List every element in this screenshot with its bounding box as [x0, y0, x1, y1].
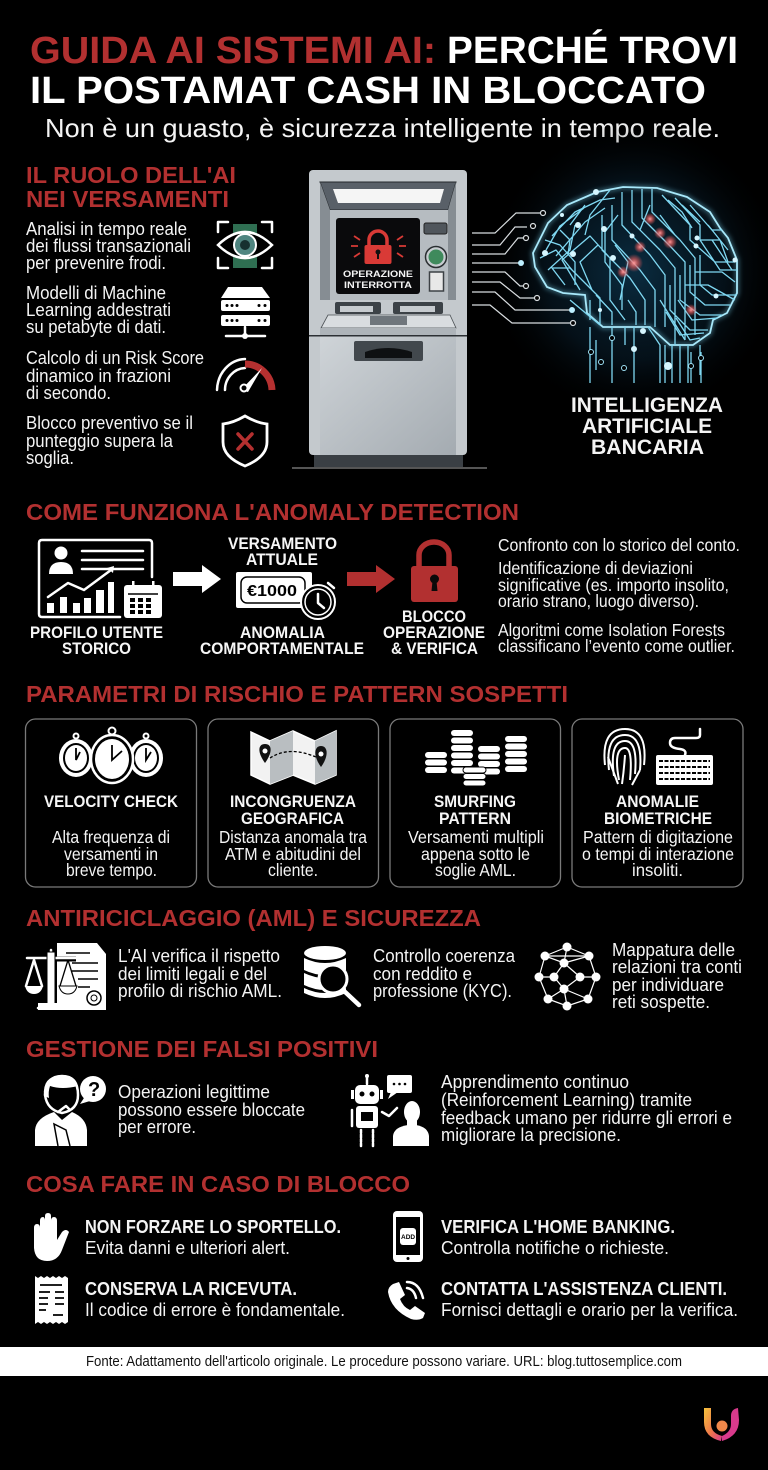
title: IL POSTAMAT CASH IN BLOCCATO — [30, 70, 706, 112]
circuit wires — [472, 210, 576, 326]
text: kyc: con reddito e — [373, 963, 472, 984]
subtitle: Non è un guasto, è sicurezza intelligente in tempo reale. — [45, 113, 720, 143]
icon: robot and human — [351, 1074, 429, 1146]
card: anomalie biometriche: insoliti. — [632, 860, 683, 880]
card: anomalie biometriche — [572, 719, 743, 887]
icon: user profile card — [39, 540, 152, 617]
icon: shield — [223, 416, 267, 466]
text: mappatura: reti sospette. — [612, 991, 710, 1012]
label: blocco operazione — [383, 607, 485, 658]
icon: eye — [218, 222, 272, 268]
heading: anomaly detection: COME FUNZIONA L'ANOMALY DETECTION — [26, 499, 519, 525]
label: versamento attuale — [228, 534, 337, 569]
text: anomaly explanation: classificano l’evento come outlier. — [498, 636, 735, 656]
text: blocco preventivo: Blocco preventivo se il — [26, 412, 193, 433]
text: limiti legali: L'AI verifica il rispetto — [118, 945, 280, 966]
title: PERCHÉ TROVI — [447, 28, 738, 72]
heading: cosa fare: COSA FARE IN CASO DI BLOCCO — [26, 1171, 410, 1197]
card: anomalie biometriche: o tempi di interazione — [582, 844, 734, 864]
icon: smartphone — [393, 1211, 423, 1262]
text: mappatura: relazioni tra conti — [612, 956, 742, 977]
icon: calendar — [124, 581, 162, 618]
card: incongruenza geografica: GEOGRAFICA — [241, 809, 344, 828]
label: anomalia comportamentale — [200, 623, 364, 658]
text: blocco preventivo — [26, 412, 193, 468]
text: apprendimento continuo — [441, 1071, 732, 1145]
card: velocity check: VELOCITY CHECK — [44, 792, 179, 811]
text: machine learning — [26, 282, 171, 337]
text: anomaly explanation: significative (es. importo insolito, — [498, 575, 729, 595]
label: profilo utente — [30, 623, 163, 658]
text: apprendimento continuo: Apprendimento continuo — [441, 1071, 629, 1092]
text: kyc: professione (KYC). — [373, 980, 512, 1001]
icon: smartphone: ADD — [401, 1234, 415, 1241]
label: blocco operazione: & VERIFICA — [391, 639, 478, 658]
footer: source bar — [0, 1347, 768, 1376]
text: home banking: Controlla notifiche o richieste. — [441, 1237, 669, 1258]
panel: falsi positivi — [26, 1036, 732, 1146]
text: anomaly explanation — [498, 535, 740, 656]
text: operazioni legittime: Operazioni legittime — [118, 1081, 270, 1102]
card: anomalie biometriche: ANOMALIE — [616, 792, 699, 811]
text: kyc: Controllo coerenza — [373, 945, 516, 966]
text: mappatura — [612, 939, 742, 1012]
icon: scales and document — [25, 943, 106, 1010]
text: machine learning: Modelli di Machine — [26, 282, 166, 303]
card: anomalie biometriche: BIOMETRICHE — [604, 809, 712, 828]
panel: parametri di rischio — [26, 681, 743, 887]
text: mappatura: Mappatura delle — [612, 939, 735, 960]
icon: map — [251, 731, 336, 784]
icon: phone call — [388, 1282, 425, 1320]
label: intelligenza artificiale bancaria: INTELLIGENZA — [571, 394, 723, 417]
card: velocity check: versamenti in — [64, 844, 158, 864]
card: incongruenza geografica: Distanza anomala tra — [219, 827, 367, 847]
icon: doubtful person — [35, 1075, 106, 1146]
text: analisi: Analisi in tempo reale — [26, 218, 187, 239]
icon: network graph — [534, 942, 600, 1010]
text: risk score — [26, 347, 204, 403]
text: limiti legali: dei limiti legali e del — [118, 963, 267, 984]
text: analisi: dei flussi transazionali — [26, 235, 191, 256]
atm screen: OPERAZIONE — [343, 269, 413, 279]
text: apprendimento continuo: feedback umano per ridurre gli errori e — [441, 1107, 732, 1128]
text: assistenza: Fornisci dettagli e orario per la verifica. — [441, 1299, 738, 1320]
card: anomalie biometriche: Pattern di digitazione — [583, 827, 733, 847]
title: GUIDA AI SISTEMI AI: — [30, 30, 436, 72]
label: anomalia comportamentale: COMPORTAMENTALE — [200, 639, 364, 658]
label: versamento attuale: ATTUALE — [246, 550, 318, 569]
text: mappatura: per individuare — [612, 974, 724, 995]
text: conserva ricevuta: CONSERVA LA RICEVUTA. — [85, 1279, 297, 1299]
label: blocco operazione: BLOCCO — [402, 607, 466, 626]
text: limiti legali: profilo di rischio AML. — [118, 980, 282, 1001]
heading: parametri di rischio: PARAMETRI DI RISCHIO E PATTERN SOSPETTI — [26, 681, 568, 707]
text: non forzare — [85, 1217, 341, 1258]
icon: fingerprint — [604, 729, 645, 785]
label: profilo utente: STORICO — [62, 639, 131, 658]
card: smurfing pattern — [390, 719, 560, 887]
text: operazioni legittime: possono essere bloccate — [118, 1099, 305, 1120]
icon: red padlock — [411, 542, 458, 602]
text: assistenza: CONTATTA L'ASSISTENZA CLIENTI. — [441, 1279, 727, 1299]
icon: stopwatches — [59, 728, 163, 783]
text: apprendimento continuo: (Reinforcement Learning) tramite — [441, 1089, 692, 1110]
text: anomaly explanation: Identificazione di deviazioni — [498, 558, 693, 578]
label: blocco operazione: OPERAZIONE — [383, 623, 485, 642]
text: anomaly explanation: Confronto con lo storico del conto. — [498, 535, 740, 555]
heading: ruolo dell'AI: IL RUOLO DELL'AI — [26, 162, 236, 188]
card: incongruenza geografica: INCONGRUENZA — [230, 792, 356, 811]
label: intelligenza artificiale bancaria — [571, 394, 723, 459]
panel: ruolo dell'AI — [26, 162, 272, 468]
icon: server — [221, 287, 270, 339]
text: risk score: di secondo. — [26, 382, 111, 403]
text: analisi — [26, 218, 191, 273]
card: velocity check: Alta frequenza di — [52, 827, 170, 847]
icon: banknote and clock — [236, 572, 335, 619]
text: home banking — [441, 1217, 675, 1258]
card: incongruenza geografica — [208, 719, 378, 887]
atm screen: INTERROTTA — [344, 280, 413, 290]
heading: antiriciclaggio: ANTIRICICLAGGIO (AML) E SICUREZZA — [26, 905, 481, 931]
icon: coin stacks — [425, 730, 527, 786]
text: limiti legali — [118, 945, 282, 1001]
atm screen — [336, 218, 420, 294]
text: conserva ricevuta: Il codice di errore è fondamentale. — [85, 1299, 345, 1320]
text: non forzare: Evita danni e ulteriori alert. — [85, 1237, 290, 1258]
arrow: red — [347, 565, 395, 593]
card: smurfing pattern: SMURFING — [434, 792, 516, 811]
icon: gauge — [217, 359, 272, 392]
text: conserva ricevuta — [85, 1279, 345, 1320]
panel: cosa fare — [26, 1171, 738, 1324]
text: risk score: dinamico in frazioni — [26, 365, 171, 386]
icon: doubtful person: ? — [88, 1079, 100, 1101]
panel: antiriciclaggio — [25, 905, 742, 1012]
panel: anomaly detection — [26, 499, 740, 658]
text: kyc — [373, 945, 516, 1001]
text: anomaly explanation: Algoritmi come Isolation Forests — [498, 620, 725, 640]
heading: falsi positivi: GESTIONE DEI FALSI POSITIVI — [26, 1036, 378, 1062]
logo — [704, 1408, 739, 1441]
text: apprendimento continuo: migliorare la precisione. — [441, 1124, 621, 1145]
text: machine learning: su petabyte di dati. — [26, 316, 166, 337]
label: versamento attuale: VERSAMENTO — [228, 534, 337, 553]
text: risk score: Calcolo di un Risk Score — [26, 347, 204, 368]
footer: source bar: Fonte: Adattamento dell'articolo originale. Le procedure possono variare. URL: blog.tuttosemplice.com — [86, 1353, 682, 1370]
text: operazioni legittime — [118, 1081, 305, 1137]
icon: banknote and clock: €1000 — [247, 583, 297, 600]
label: anomalia comportamentale: ANOMALIA — [240, 623, 325, 642]
illustration: ATM — [292, 170, 487, 469]
text: blocco preventivo: soglia. — [26, 447, 74, 468]
icon: database with magnifier — [304, 946, 359, 1005]
text: machine learning: Learning addestrati — [26, 299, 171, 320]
label: intelligenza artificiale bancaria: ARTIFICIALE — [582, 415, 712, 438]
icon: keyboard — [656, 729, 713, 785]
label: intelligenza artificiale bancaria: BANCARIA — [591, 436, 704, 459]
icon: hand — [34, 1213, 69, 1261]
arrow: white — [173, 565, 221, 593]
text: home banking: VERIFICA L'HOME BANKING. — [441, 1217, 675, 1237]
text: blocco preventivo: punteggio supera la — [26, 430, 174, 451]
card: smurfing pattern: Versamenti multipli — [408, 827, 544, 847]
illustration: neural brain — [472, 120, 768, 420]
text: operazioni legittime: per errore. — [118, 1116, 196, 1137]
card: incongruenza geografica: cliente. — [268, 860, 318, 880]
card: velocity check — [26, 719, 196, 887]
card: smurfing pattern: soglie AML. — [435, 860, 516, 880]
card: smurfing pattern: PATTERN — [439, 809, 511, 828]
text: assistenza — [441, 1279, 738, 1320]
title — [30, 28, 738, 112]
text: analisi: per prevenire frodi. — [26, 252, 166, 273]
icon: receipt — [35, 1276, 68, 1324]
heading: ruolo dell'AI: NEI VERSAMENTI — [26, 186, 229, 212]
text: anomaly explanation: orario strano, luogo diverso). — [498, 591, 699, 611]
label: profilo utente: PROFILO UTENTE — [30, 623, 163, 642]
text: non forzare: NON FORZARE LO SPORTELLO. — [85, 1217, 341, 1237]
card: smurfing pattern: appena sotto le — [421, 844, 530, 864]
card: velocity check: breve tempo. — [66, 860, 157, 880]
card: incongruenza geografica: ATM e abitudini del — [225, 844, 361, 864]
heading: ruolo dell'AI — [26, 162, 236, 212]
